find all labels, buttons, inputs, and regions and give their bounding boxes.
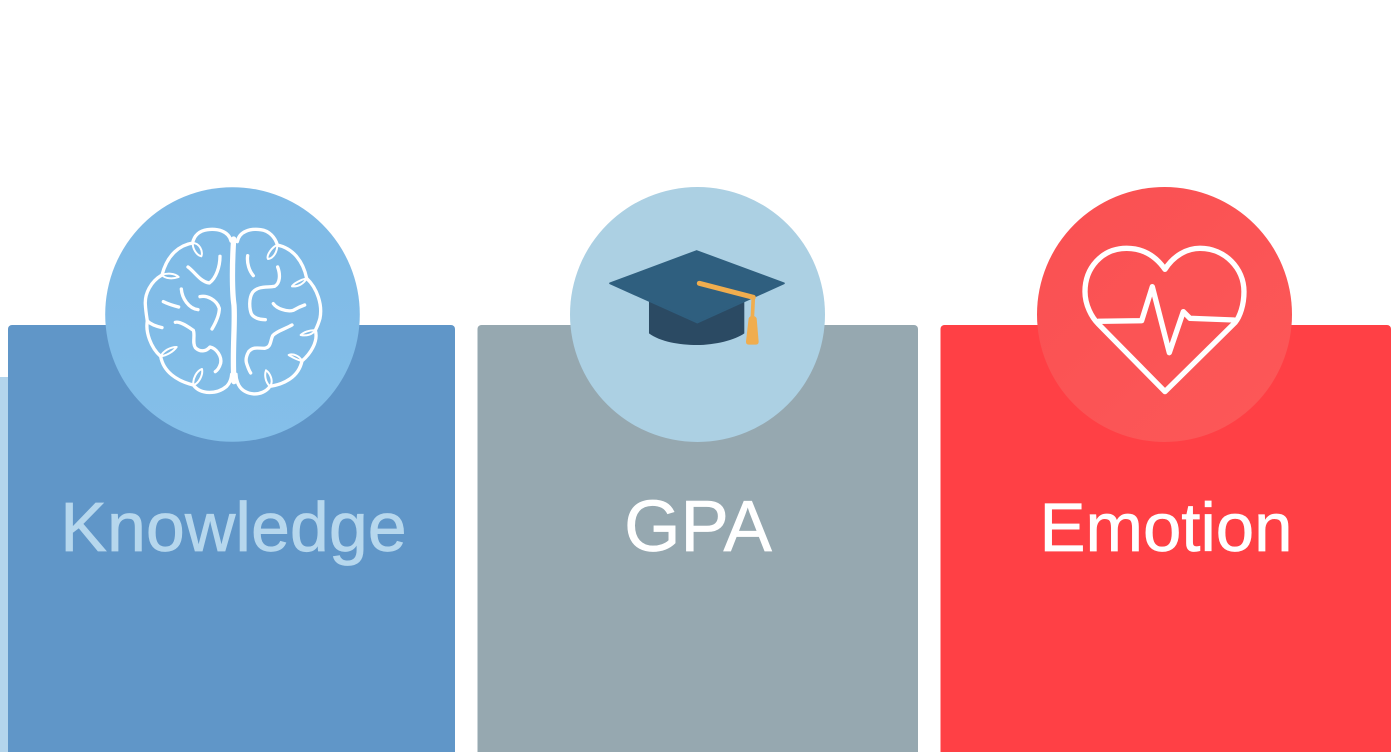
GPA card background [478,325,918,752]
icon: graduation cap [610,251,784,345]
left edge sliver panel [0,377,8,752]
tassel [699,283,759,345]
Knowledge icon circle [105,187,360,442]
cap board [610,251,784,323]
Emotion card background [940,325,1391,752]
heading: Knowledge: Knowledge [60,488,407,566]
heading: Emotion: Emotion [1039,489,1293,566]
panel: Emotion [940,187,1391,752]
panel: GPA [478,187,918,752]
Emotion icon circle [1037,187,1292,442]
heading: GPA: GPA [624,486,773,567]
cap base [649,297,744,345]
icon: brain [145,229,321,394]
GPA icon circle [570,187,825,442]
panel: Knowledge [8,187,455,752]
Knowledge card background [8,325,455,752]
icon: heart with pulse line [1085,248,1244,392]
